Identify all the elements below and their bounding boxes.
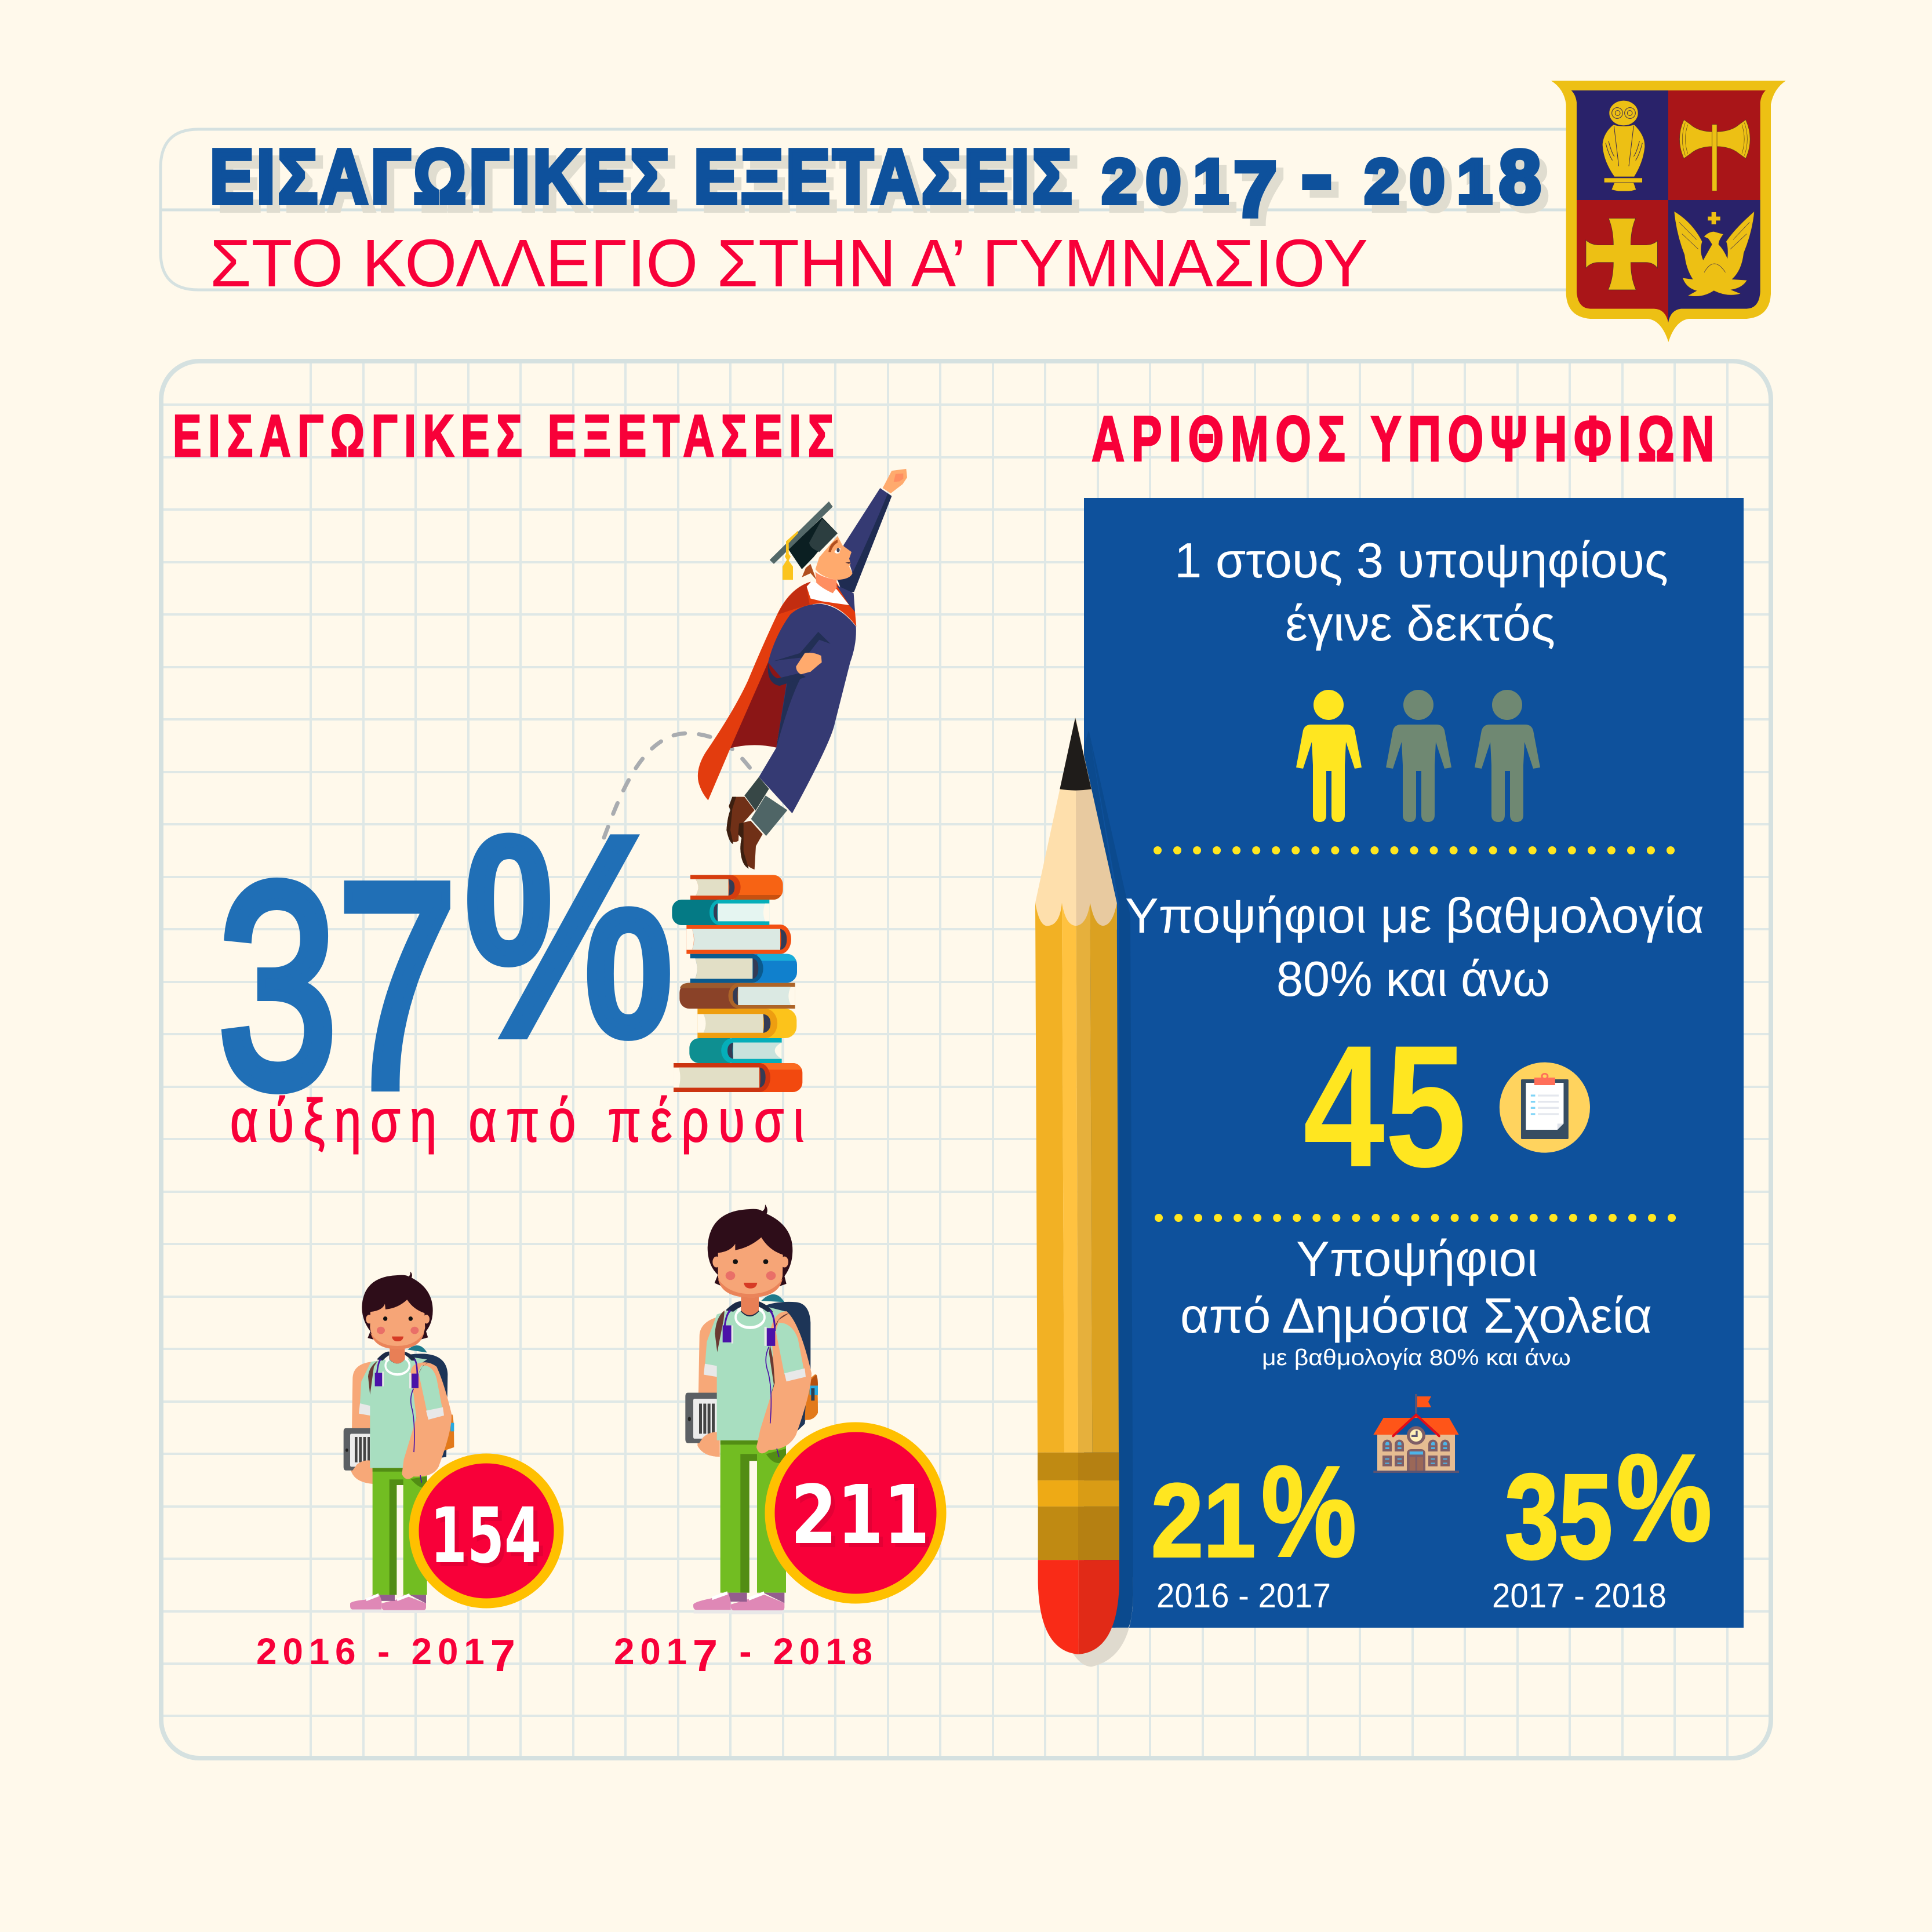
tablet [685, 1393, 718, 1443]
hair [802, 564, 816, 580]
year label 2017-2018: 7 [693, 1630, 718, 1681]
book 4 [690, 954, 797, 983]
left arm [351, 1362, 373, 1484]
text: candidates with 80%: 80% και άνω [1276, 952, 1550, 1007]
hood and collar [807, 583, 856, 627]
gown [759, 604, 856, 813]
trousers [721, 1440, 786, 1593]
year label 2016-2017: 7 [490, 1630, 515, 1681]
head [362, 1272, 433, 1340]
raised arm [836, 488, 892, 592]
right arm [402, 1362, 452, 1479]
small badge 154 [414, 1458, 559, 1603]
number 154: 154 [430, 1491, 541, 1581]
text: public school candidates: από Δημόσια Σχολεία [1180, 1289, 1652, 1344]
clipboard icon [1500, 1063, 1590, 1153]
title [210, 121, 1541, 233]
title: 201 [1365, 146, 1492, 216]
book 2 [672, 900, 769, 925]
right arm [756, 1311, 812, 1453]
title: - [1301, 121, 1333, 227]
bent arm [768, 663, 806, 686]
stack of books [672, 875, 802, 1092]
number 211: 211 [791, 1468, 930, 1563]
year 2016-2017: 2016 - 2017 [1156, 1577, 1331, 1615]
title: ΕΙΣΑΓΩΓΙΚΕΣ ΕΞΕΤΑΣΕΙΣ [210, 134, 1075, 219]
pencil body [1035, 903, 1064, 1453]
pencil wood [1035, 718, 1117, 930]
blue statistics panel [1084, 498, 1744, 1628]
stat 35%: % [1617, 1429, 1712, 1566]
year 2017-2018: 2017 - 2018 [1492, 1577, 1667, 1615]
stat 21% [1151, 1440, 1356, 1584]
neck [816, 572, 836, 593]
person grey [1386, 690, 1451, 822]
title: 201 [1102, 146, 1228, 216]
big stat 37%: 37 [218, 823, 457, 1147]
book 8 [674, 1063, 802, 1092]
pencil lead [1060, 718, 1091, 791]
year label 2017-2018: 201 [614, 1631, 687, 1672]
book 6 [697, 1009, 796, 1038]
face [816, 536, 853, 580]
text: 1 in 3 admitted [1174, 533, 1668, 652]
large badge 211 [770, 1427, 941, 1599]
header frame [161, 129, 1577, 290]
backpack [410, 1354, 447, 1462]
crest: owl [1602, 100, 1645, 191]
head [708, 1205, 792, 1287]
subtitle: ΣΤΟ ΚΟΛΛΕΓΙΟ ΣΤΗΝ Α’ ΓΥΜΝΑΣΙΟΥ [210, 225, 1368, 301]
shoes [350, 1595, 381, 1610]
book 3 [686, 925, 791, 954]
year label 2017-2018: - 2018 [723, 1631, 872, 1672]
small student illustration [344, 1272, 454, 1613]
text: public school candidates: Υποψήφιοι [1296, 1232, 1538, 1287]
heading: entrance exams: ΕΙΣΑΓΩΓΙΚΕΣ ΕΞΕΤΑΣΕΙΣ [173, 403, 841, 469]
big stat 37% [218, 779, 674, 1147]
t-shirt [359, 1357, 427, 1468]
trousers [744, 777, 769, 811]
school icon [1373, 1394, 1459, 1473]
stat 35% [1505, 1429, 1712, 1584]
text: candidates with 80% [1125, 889, 1704, 1007]
stat 35%: 35 [1505, 1450, 1613, 1584]
large student illustration [685, 1205, 818, 1614]
person grey [1475, 690, 1540, 822]
title: 8 [1499, 134, 1541, 219]
pencil bands [1038, 1453, 1078, 1560]
people icons [1296, 690, 1540, 822]
mortarboard cap [788, 518, 838, 569]
stat caption: αύξηση από πέρυσι [230, 1087, 813, 1155]
graduate illustration [698, 469, 907, 869]
strap [715, 1311, 725, 1352]
strap [368, 1360, 378, 1395]
text: candidates with 80%: Υποψήφιοι με βαθμολογία [1125, 889, 1704, 944]
text: 1 in 3 admitted: 1 στους 3 υποψηφίους [1174, 533, 1668, 588]
tablet [344, 1428, 371, 1471]
backpack [763, 1302, 810, 1432]
neck and collar [385, 1356, 409, 1374]
book 7 [689, 1038, 782, 1063]
pencil shadow [1067, 1577, 1133, 1667]
pencil eraser [1038, 1560, 1079, 1654]
year label 2016-2017: 2016 - 201 [256, 1631, 485, 1672]
pencil [1035, 718, 1133, 1667]
book 5 [679, 983, 795, 1009]
title: 7 [1234, 145, 1277, 233]
person yellow [1296, 690, 1362, 822]
big stat 37%: % [464, 779, 674, 1093]
crest: phoenix [1674, 211, 1755, 296]
tassel [783, 530, 798, 580]
crest: cross [1586, 219, 1657, 290]
text: public school candidates [1180, 1232, 1652, 1370]
text: public school candidates: με βαθμολογία 80% και άνω [1262, 1345, 1571, 1370]
frame border [161, 361, 1771, 1758]
stat 21%: % [1261, 1440, 1356, 1584]
crest: double axe [1679, 120, 1750, 191]
book 1 [690, 875, 783, 900]
headphones [376, 1359, 417, 1379]
boots [726, 797, 755, 842]
grid lines [163, 363, 1769, 1756]
main notebook panel [161, 361, 1771, 1758]
left arm [697, 1317, 720, 1457]
t-shirt [704, 1306, 787, 1440]
cape [698, 582, 813, 801]
number 45: 45 [1303, 1009, 1467, 1203]
shoes [693, 1593, 731, 1610]
text: 1 in 3 admitted: έγινε δεκτός [1285, 596, 1555, 652]
dashed jump arc [604, 733, 756, 838]
neck and collar [736, 1307, 765, 1327]
trousers [373, 1468, 427, 1595]
stat 21%: 21 [1151, 1462, 1256, 1579]
school crest [1551, 81, 1786, 342]
headphones [724, 1311, 775, 1331]
